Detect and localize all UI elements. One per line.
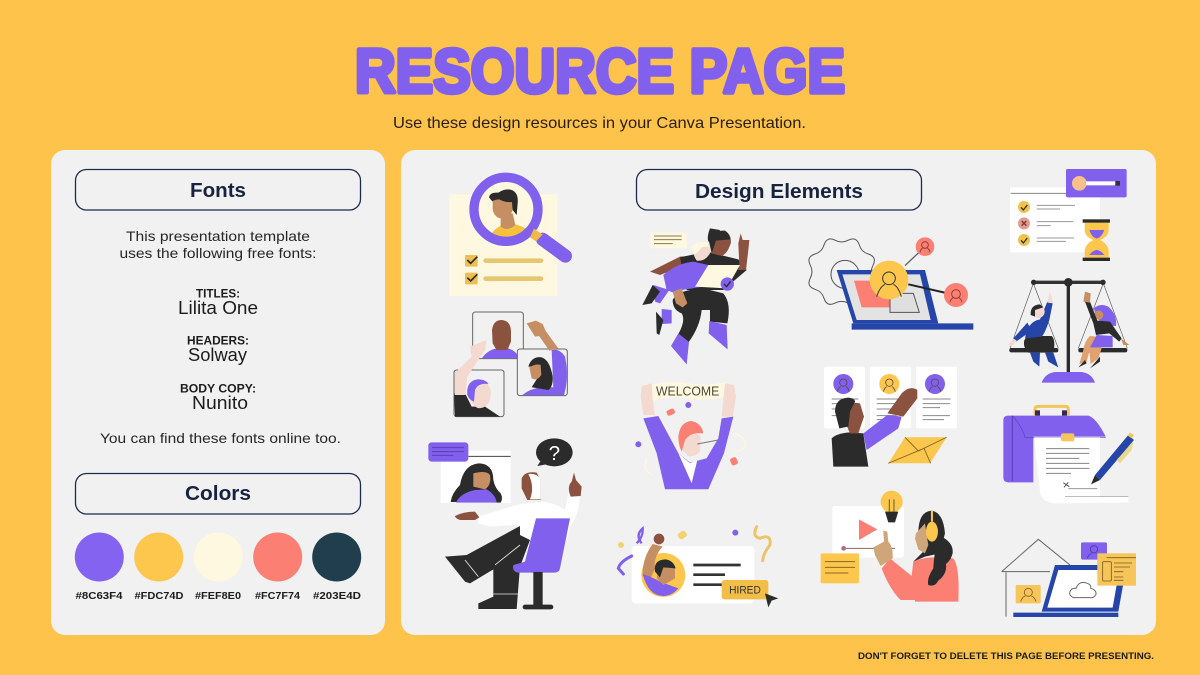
panel: fonts and colors xyxy=(51,150,385,635)
text block: fonts note: You can find these fonts online too. xyxy=(100,430,341,446)
illustration: laptop network with gear xyxy=(809,237,973,330)
panel: design elements xyxy=(401,150,1156,635)
text block: font list: Nunito xyxy=(192,393,248,413)
color swatches: #203E4D xyxy=(313,590,361,602)
color swatches: #8C63F4 xyxy=(76,590,123,602)
illustration: video lesson with headset xyxy=(821,491,959,602)
color swatches xyxy=(75,532,361,602)
text block: font intro: uses the following free fonts: xyxy=(120,245,316,261)
illustration: briefcase with contract and pen xyxy=(1003,406,1134,503)
color swatches: #FEF8E0 xyxy=(195,590,241,602)
illustration: man with question bubble: ? xyxy=(549,442,560,465)
illustration: welcome banner person xyxy=(635,382,745,489)
text block: font list: BODY COPY: xyxy=(180,382,256,396)
text block: font list: Lilita One xyxy=(178,298,258,318)
text block: font list: HEADERS: xyxy=(187,334,249,348)
illustration: man with question bubble xyxy=(428,438,582,609)
illustration: balance scale with people xyxy=(1008,278,1129,383)
color swatches: #FC7F74 xyxy=(255,590,300,602)
text block: font intro: This presentation template xyxy=(126,228,310,244)
illustration: checklist with hourglass xyxy=(1010,169,1127,261)
heading: design elements xyxy=(636,170,922,210)
text block: font intro xyxy=(120,228,316,261)
banner text: WELCOME xyxy=(656,385,719,399)
illustration: house with laptop and documents xyxy=(1002,539,1136,617)
illustration: flying people with laptop xyxy=(642,228,749,364)
color swatches: #FDC74D xyxy=(134,590,184,602)
text block: font list: Solway xyxy=(188,345,247,365)
illustration: resumes and envelope xyxy=(824,367,957,467)
heading: design elements: Design Elements xyxy=(695,181,863,203)
text block: font list xyxy=(178,286,258,413)
heading: fonts: Fonts xyxy=(190,180,246,202)
title: RESOURCE PAGE xyxy=(355,38,845,106)
heading: colors: Colors xyxy=(185,483,251,505)
subtitle: Use these design resources in your Canva Presentation. xyxy=(393,115,806,132)
illustration: hired card xyxy=(618,527,778,607)
heading: fonts xyxy=(76,170,360,210)
illustration: video call tiles xyxy=(454,312,567,417)
text block: font list: TITLES: xyxy=(196,286,240,300)
heading: colors xyxy=(76,474,360,514)
footer note: DON'T FORGET TO DELETE THIS PAGE BEFORE PRESENTING. xyxy=(858,651,1154,661)
tag text: HIRED xyxy=(729,585,761,597)
illustration: magnifier over resume xyxy=(449,177,565,296)
